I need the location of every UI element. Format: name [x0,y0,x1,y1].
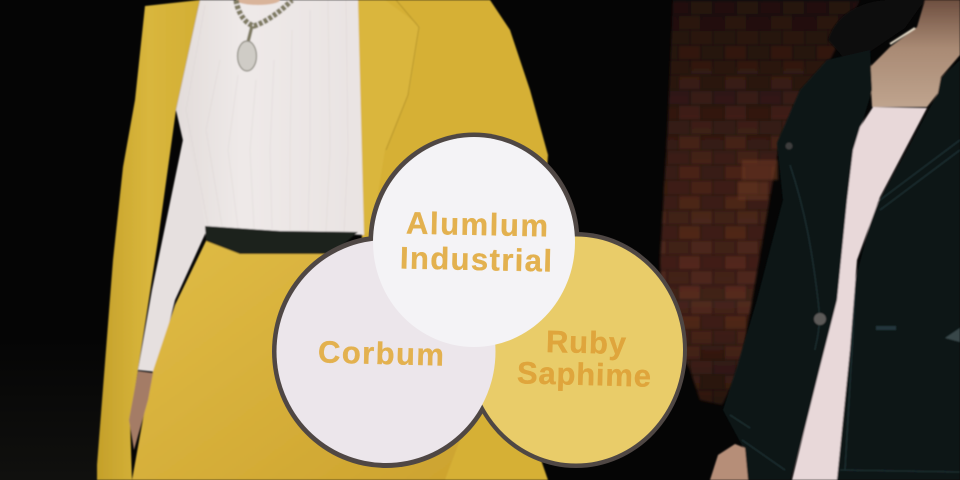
brick wall [660,0,860,405]
necklace and pendant [236,0,292,71]
dim ground at lower left [0,340,110,480]
right hand [710,444,748,480]
circle: alumlum industrial: Industrial [400,240,552,279]
circle: ruby saphime: Ruby [546,324,627,361]
left figure [97,0,548,480]
circle: alumlum industrial [373,137,575,347]
skin at neck and chest [870,0,960,107]
right figure [710,0,960,480]
white ribbed top [138,0,364,372]
skin at neck [236,0,280,5]
circle: corbum: Corbum [318,334,444,373]
circle: corbum [276,240,496,463]
left hand [129,371,153,450]
white dress [792,107,927,480]
circle: ruby saphime: Saphime [517,355,651,394]
venn diagram [272,132,687,468]
black belt [205,226,358,254]
gold skirt [132,241,460,480]
circle: ruby saphime [469,236,683,464]
necklace strap [890,28,915,44]
circle: alumlum industrial: Alumlum [406,206,548,243]
dark jacket [723,50,960,480]
yellow coat [97,0,548,480]
dark hair [828,0,925,65]
outline of the three circles [272,132,687,468]
